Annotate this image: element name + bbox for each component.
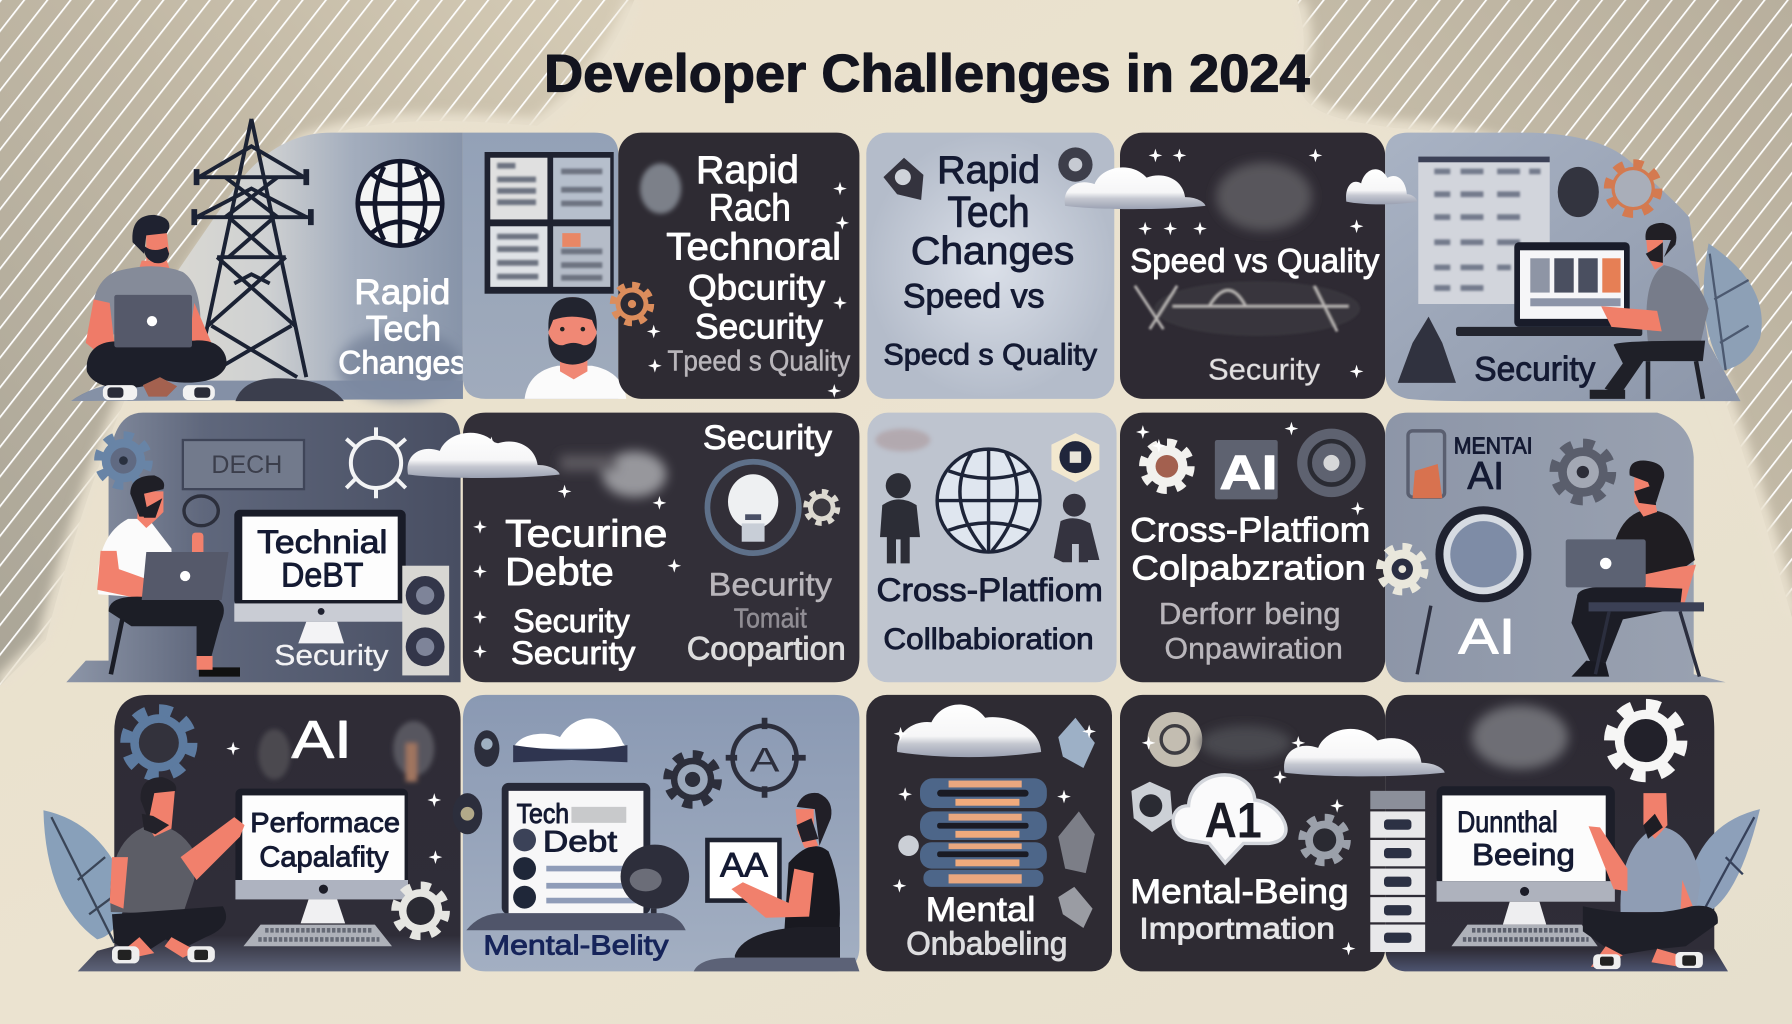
- icon: speakers: [402, 566, 449, 675]
- label: stacked headings: Specd s Quality: [883, 339, 1097, 372]
- icon: gear orange overlay: [613, 285, 651, 323]
- label: right stacked text: Coopartion: [687, 630, 846, 666]
- panel: AI performance dark: [43, 695, 461, 971]
- label: performance quality: Capalafity: [259, 841, 389, 873]
- icon: leaf: [1689, 809, 1760, 914]
- label: mental-being information: Mental-Being: [1130, 873, 1349, 911]
- icon: hexagon badge: [1051, 433, 1099, 482]
- icon: globe: [937, 449, 1040, 552]
- label: AI dark: AI: [1467, 455, 1504, 498]
- icon: blue gear: [126, 710, 192, 776]
- icon: swirl disc: [1147, 712, 1202, 767]
- icon: white gear: [1610, 705, 1681, 776]
- panel: rapid tech changes with tower: [71, 119, 466, 402]
- blurred decoration: [560, 451, 666, 497]
- label: securing debt stacked text: Debte: [505, 551, 614, 594]
- label: mental onbabeling: [906, 891, 1067, 961]
- panel: tech debt list gray: [453, 695, 859, 971]
- label: dunnthal being: Dunnthal: [1457, 806, 1558, 839]
- icon: monitor: [1437, 786, 1615, 946]
- icon: stacked cone: [1398, 317, 1456, 383]
- label: securing debt stacked text: Security: [513, 603, 630, 639]
- decoration: sparkles: [1136, 422, 1365, 515]
- label: securing debt stacked text: [505, 512, 667, 671]
- label: security: Security: [703, 419, 833, 457]
- icon: document list: [502, 783, 650, 914]
- label: dunnthal being: Beeing: [1472, 837, 1575, 872]
- icon: drawer tower: [1370, 791, 1425, 952]
- icon: base shelf: [466, 913, 686, 930]
- label: mental onbabeling: Mental: [926, 891, 1035, 929]
- panel: rapid tech changes light: [866, 133, 1114, 399]
- label: DECH sign: [183, 440, 304, 489]
- label: performance quality: Performace: [250, 807, 400, 838]
- label: right stacked text: [687, 566, 846, 666]
- icon: AI speech cloud: [1173, 775, 1286, 863]
- icon: orange gear: [1608, 164, 1658, 214]
- panel: security developer with screen: [1346, 133, 1762, 401]
- label: stacked headings: Changes: [911, 230, 1074, 273]
- icon: person left: [880, 473, 920, 563]
- icon: sun gear: [346, 427, 406, 498]
- label: cross-platform collaboration: Onpawiration: [1165, 632, 1343, 665]
- icon: small eye badge: [453, 793, 482, 834]
- icon: developer seated: [694, 793, 859, 971]
- decoration: sparkles: [222, 742, 442, 878]
- icon: developer seated pointing: [1583, 793, 1718, 969]
- icon: A in ring: [726, 718, 806, 798]
- icon: document grid: [485, 152, 614, 294]
- label: cross-platform collaboration: Derforr being: [1159, 596, 1341, 631]
- icon: AI speech cloud: A1: [1205, 792, 1262, 849]
- label: stacked headings: Rapid: [937, 149, 1040, 192]
- blurred decoration: [258, 721, 434, 782]
- decoration: sparkles: [1138, 149, 1363, 378]
- title: Developer Challenges in 2024: [544, 44, 1310, 103]
- icon: white gear: [1143, 443, 1191, 490]
- label: right stacked text: Becurity: [709, 566, 832, 602]
- icon: leaf: [1704, 243, 1762, 370]
- icon: phone device: [1408, 431, 1445, 498]
- icon: gear: [668, 754, 718, 804]
- smudge: [875, 429, 930, 451]
- label: security: Security: [274, 640, 389, 672]
- label: mental-belity: Mental-Belity: [483, 929, 669, 960]
- panel: AI mental-being: [1120, 695, 1385, 971]
- icon: gear light: [806, 492, 837, 523]
- label: stacked headings: Speed vs: [903, 277, 1045, 315]
- icon: left badge: [474, 730, 499, 767]
- label: stacked headings: Tech: [947, 188, 1030, 236]
- icon: laptop on desk: [1456, 242, 1642, 336]
- label: AI white: AI: [1458, 608, 1515, 665]
- icon: AI block: [1215, 440, 1278, 500]
- label: technical debt: [257, 524, 387, 594]
- icon: bearded portrait: [525, 297, 626, 399]
- icon: leaf: [43, 810, 128, 943]
- label: tech debt: Tech: [517, 798, 569, 829]
- icon: lightbulb ring: [707, 462, 799, 553]
- panel: securing debt dark: [407, 413, 859, 682]
- label: stacked headings: Tpeed s Quality: [667, 345, 851, 377]
- label: stacked headings: [883, 149, 1097, 372]
- label: cross-platform collaboration: Cross-Platfiom: [877, 572, 1103, 608]
- icon: developer pointing: [110, 777, 245, 963]
- icon: cloud: [897, 705, 1041, 757]
- label: stacked headings: Rapid: [696, 149, 799, 192]
- icon: developer on bench: [1417, 460, 1704, 677]
- decoration: side shapes and sparkles: [893, 718, 1096, 928]
- label: right stacked text: Tomait: [734, 602, 807, 633]
- blurred scissors and chart: [1135, 281, 1360, 336]
- panel: dashboards and portrait: [463, 133, 626, 399]
- icon: developer seated: [1590, 223, 1709, 399]
- icon: ring: [1297, 429, 1366, 497]
- icon: AA card: [705, 838, 782, 903]
- icon: developer with laptop: [97, 475, 240, 677]
- icon: dark shield: [1558, 167, 1599, 217]
- label: cross-platform collaboration: [877, 572, 1103, 656]
- icon: server smudge: [640, 163, 681, 214]
- panel: speed vs quality dark: [1065, 133, 1385, 399]
- panel: cross-platform light: [867, 413, 1117, 682]
- icon: AI block: AI: [1219, 447, 1278, 500]
- icon: person right: [1054, 494, 1099, 562]
- icon: transmission tower: [194, 119, 311, 377]
- icon: cloud over panels: [407, 433, 560, 478]
- label: technical debt: DeBT: [281, 556, 363, 594]
- label: MENTAI: MENTAI: [1454, 433, 1533, 459]
- panel: rapid technical security dark: [613, 133, 859, 399]
- label: stacked headings: Security: [695, 306, 823, 346]
- icon: small hex gear: [1380, 547, 1425, 591]
- label: tech debt: Debt: [543, 825, 618, 858]
- icon: dark gear: [1302, 818, 1347, 862]
- label: stacked headings: Technoral: [666, 225, 841, 267]
- label: mental-being information: Importmation: [1139, 912, 1335, 945]
- icon: swirl badge: [184, 496, 218, 526]
- label: performance quality: [250, 807, 400, 873]
- panel: monitor with developer: [1284, 695, 1760, 971]
- panel: AI cross-platform dark: [1120, 413, 1385, 682]
- blurred decoration: [1472, 705, 1568, 769]
- label: cross-platform collaboration: Cross-Platfiom: [1130, 512, 1370, 550]
- panel: technical debt: [66, 413, 461, 682]
- label: dunnthal being: [1457, 806, 1575, 872]
- icon: monitor: [234, 510, 406, 643]
- striped corner pattern: top left: [0, 0, 634, 686]
- label: cross-platform collaboration: [1130, 512, 1370, 665]
- icon: globe: [358, 161, 442, 246]
- label: Rapid Tech Changes: Tech: [366, 309, 441, 349]
- label: Rapid Tech Changes: [338, 272, 466, 381]
- icon: left hex: [1131, 782, 1173, 832]
- icon: gear blue: [98, 436, 148, 486]
- label: stacked headings: [666, 149, 851, 377]
- panel: mental AI gray: [1380, 413, 1726, 682]
- icon: A in ring: A: [750, 741, 780, 779]
- icon: person with laptop: [86, 215, 227, 400]
- icon: white gear: [396, 886, 446, 936]
- label: stacked headings: Qbcurity: [688, 267, 825, 307]
- label: AI: AI: [291, 711, 352, 770]
- label: securing debt stacked text: Tecurine: [505, 512, 667, 554]
- blurred decoration: [1200, 726, 1291, 760]
- blurred decoration: [1216, 162, 1312, 231]
- decoration: sparkles: [473, 437, 681, 658]
- label: technical debt: Technial: [257, 524, 387, 560]
- panel: mental wellbeing server stack: [866, 695, 1112, 971]
- icon: plant: [621, 845, 689, 920]
- label: security: Security: [1474, 351, 1596, 389]
- icon: cloud over panels: [1284, 729, 1445, 776]
- label: security: Security: [1208, 353, 1320, 386]
- icon: cloud over panels: [1065, 167, 1205, 209]
- decoration: sparkles: [1142, 736, 1355, 955]
- label: Rapid Tech Changes: Changes: [338, 345, 466, 381]
- label: speed vs quality: Speed vs Quality: [1130, 243, 1380, 280]
- icon: gear gray: [1554, 444, 1611, 500]
- label: cross-platform collaboration: Collbabioration: [883, 623, 1094, 656]
- label: stacked headings: Rach: [709, 187, 791, 229]
- label: mental onbabeling: Onbabeling: [906, 925, 1067, 961]
- label: Rapid Tech Changes: Rapid: [354, 272, 450, 312]
- label: securing debt stacked text: Security: [511, 635, 635, 671]
- icon: cloud: [1346, 169, 1417, 204]
- icon: monitor: [235, 789, 408, 946]
- icon: badge right: [1058, 147, 1093, 182]
- icon: washer ring: [1435, 506, 1531, 602]
- icon: server stack: [920, 778, 1047, 887]
- icon: table document: [1418, 157, 1550, 304]
- icon: cloud dark base: [513, 718, 627, 762]
- icon: AA card: AA: [720, 847, 768, 885]
- icon: badge left: [883, 158, 923, 200]
- label: DECH sign: DECH: [211, 451, 282, 479]
- striped corner pattern: top right: [1297, 0, 1792, 617]
- label: mental-being information: [1130, 873, 1349, 945]
- label: cross-platform collaboration: Colpabzration: [1131, 549, 1366, 587]
- label: tech debt: [517, 798, 618, 858]
